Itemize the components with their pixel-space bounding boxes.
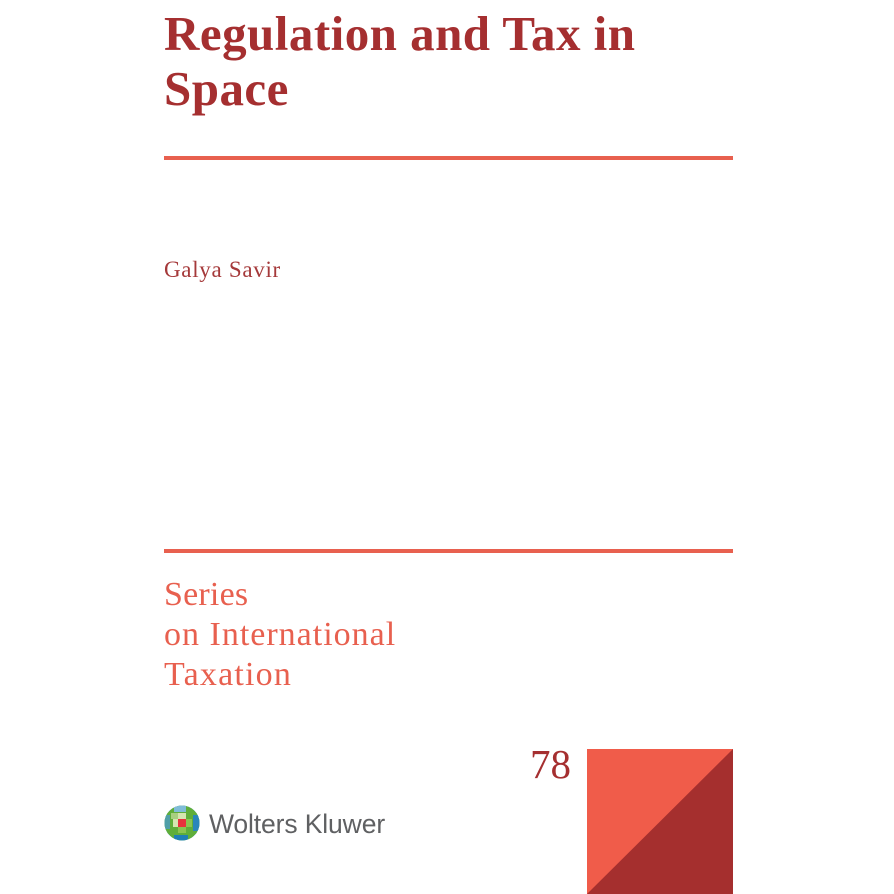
series name: Series bbox=[164, 576, 248, 613]
title bbox=[164, 6, 635, 116]
publisher name: Wolters Kluwer bbox=[209, 809, 385, 839]
series name bbox=[164, 576, 396, 693]
title: Regulation and Tax in bbox=[164, 6, 635, 61]
icon: series square bbox=[587, 749, 733, 894]
series number: 78 bbox=[530, 741, 571, 787]
series divider bbox=[164, 549, 733, 553]
top divider bbox=[164, 156, 733, 160]
title: Space bbox=[164, 61, 289, 116]
publisher logo bbox=[164, 806, 385, 840]
series name: on International bbox=[164, 616, 396, 653]
icon: globe bbox=[164, 806, 200, 840]
series name: Taxation bbox=[164, 656, 292, 693]
author: Galya Savir bbox=[164, 257, 281, 282]
